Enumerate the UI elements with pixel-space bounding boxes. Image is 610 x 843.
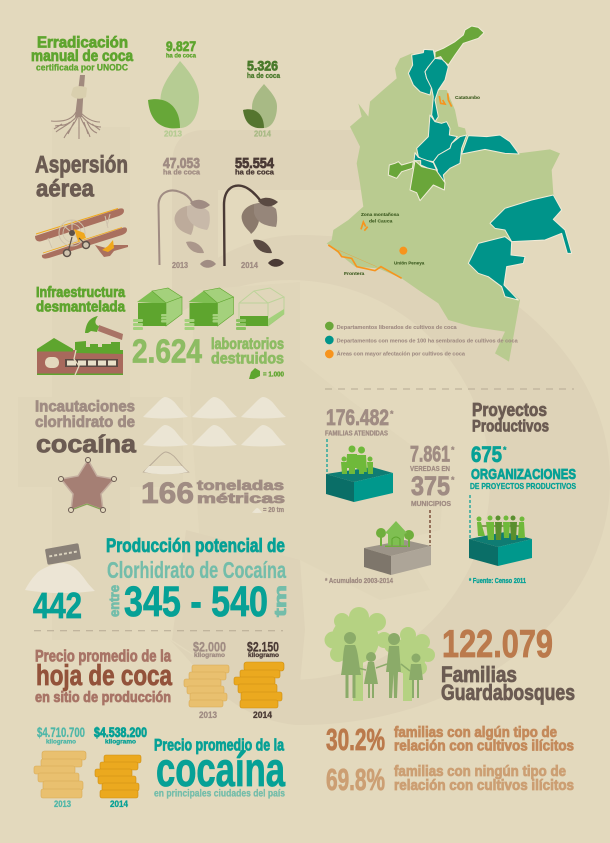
map labels: Unión Peneya bbox=[394, 260, 425, 266]
heading: producción potencial: Producción potencial de bbox=[106, 536, 285, 557]
chart: leaf 2014 bbox=[243, 58, 280, 139]
chart: leaf 2014: 5.326 bbox=[247, 58, 278, 74]
chart: coins 2014: kilogramo bbox=[248, 652, 279, 659]
heading: precio cocaína: cocaína bbox=[156, 744, 285, 797]
stat: 675 organizaciones: 675 bbox=[471, 442, 502, 467]
chart: wilted plant 2013: 2013 bbox=[172, 261, 188, 270]
heading: precio cocaína: en principales ciudades del país bbox=[154, 788, 285, 800]
heading: erradicación: Erradicación bbox=[37, 34, 128, 51]
heading: aspersión aérea bbox=[35, 152, 128, 203]
chart: coins 2013: 2013 bbox=[199, 710, 217, 720]
map labels: del Cauca bbox=[369, 219, 393, 225]
chart: coins cocaína 2013: 2013 bbox=[54, 799, 71, 809]
heading: incautaciones: clorhidrato de bbox=[35, 414, 135, 431]
heading: familias guardabosques bbox=[441, 662, 575, 705]
map labels: Catatumbo bbox=[455, 95, 480, 101]
stat: 176.482 bbox=[325, 405, 394, 438]
legend: pile equals 20 tm bbox=[252, 507, 284, 514]
heading: aspersión aérea: aérea bbox=[36, 176, 95, 203]
stat: 375 municipios: * bbox=[451, 475, 455, 485]
icon: trees and family bbox=[324, 607, 435, 701]
chart: wilted plant 2013: 47.053 bbox=[163, 155, 200, 172]
heading: producción potencial bbox=[106, 536, 286, 583]
icon: police star bbox=[58, 458, 116, 512]
chart: coins cocaína 2013 bbox=[34, 724, 86, 809]
map: teal departments bbox=[408, 49, 572, 300]
chart: wilted plant 2013 bbox=[158, 155, 216, 270]
stat: 166 toneladas: 166 bbox=[141, 477, 194, 510]
stat: 166 toneladas bbox=[141, 477, 285, 510]
heading: infraestructura: desmantelada bbox=[36, 299, 126, 316]
stat: 7.861 veredas: * bbox=[451, 445, 455, 455]
icon: broken factory bbox=[37, 338, 123, 375]
icon: people around table bbox=[476, 516, 525, 540]
heading: incautaciones bbox=[35, 399, 137, 459]
heading: proyectos productivos: Proyectos bbox=[472, 400, 547, 420]
map base bbox=[327, 53, 572, 362]
panel: aspersión aérea bbox=[35, 152, 284, 270]
icon: biplane bbox=[35, 208, 128, 259]
stat: 2.624 laboratorios: 2.624 bbox=[132, 332, 203, 369]
stat: 675 organizaciones bbox=[470, 442, 576, 491]
heading: proyectos productivos bbox=[472, 400, 549, 436]
stat: 69.8% bbox=[326, 762, 574, 797]
chart: wilted plant 2014: ha de coca bbox=[235, 168, 275, 176]
stat: 30.2%: relación con cultivos ilícitos bbox=[394, 738, 574, 755]
chart: wilted plant 2014: 55.554 bbox=[235, 155, 275, 172]
chart: coins cocaína 2014 bbox=[94, 724, 147, 809]
panel: veredas y municipios bbox=[325, 442, 455, 585]
heading: precio hoja: Precio promedio de la bbox=[35, 647, 171, 666]
stat: 345 - 540 tm: entre bbox=[106, 585, 122, 617]
panel: incautaciones bbox=[35, 397, 286, 514]
stat: 345 - 540 tm: tm bbox=[271, 585, 290, 617]
heading: erradicación bbox=[31, 34, 133, 74]
stat: 375 municipios: MUNICIPIOS bbox=[411, 499, 451, 508]
stat: 176.482: * bbox=[390, 409, 394, 419]
heading: precio cocaína bbox=[154, 736, 285, 800]
legend: pile equals 20 tm: = 20 tm bbox=[263, 507, 284, 514]
heading: incautaciones: cocaína bbox=[36, 431, 137, 459]
heading: precio hoja: hoja de coca bbox=[36, 660, 173, 692]
chart: leaf 2013: 2013 bbox=[164, 130, 183, 139]
heading: precio cocaína: Precio promedio de la bbox=[154, 736, 284, 755]
heading: erradicación: certificada por UNODC bbox=[36, 63, 128, 74]
chart: wilted plant 2013: ha de coca bbox=[163, 168, 201, 176]
map labels: Zona montañosa bbox=[361, 212, 399, 218]
chart: destroyed labs houses bbox=[133, 288, 284, 330]
heading: infraestructura: Infraestructura bbox=[36, 284, 126, 301]
heading: infraestructura bbox=[36, 284, 126, 316]
icon: razor blade bbox=[45, 543, 81, 565]
icon: teal block bbox=[469, 532, 532, 566]
stat: 2.624 laboratorios: destruidos bbox=[211, 350, 284, 368]
heading: precio hoja: en sitio de producción bbox=[35, 689, 171, 706]
map legend bbox=[325, 322, 518, 358]
panel: familias atendidas bbox=[325, 405, 394, 502]
panel: erradicación manual bbox=[31, 34, 280, 139]
stat: 442: 442 bbox=[33, 585, 82, 626]
panel: precio hoja de coca bbox=[35, 639, 284, 720]
heading: incautaciones: Incautaciones bbox=[35, 399, 135, 416]
stat: 30.2% bbox=[326, 722, 574, 757]
stat: 166 toneladas: métricas bbox=[197, 490, 285, 506]
map labels: Frontera bbox=[344, 271, 365, 277]
heading: proyectos productivos: Productivos bbox=[472, 417, 549, 436]
stat: 7.861 veredas: VEREDAS EN bbox=[410, 464, 450, 473]
map legend: Departamentos liberados de cultivos de coca bbox=[337, 325, 457, 331]
stat: 30.2%: familias con algún tipo de bbox=[394, 724, 557, 741]
stat: 2.624 laboratorios bbox=[132, 332, 284, 369]
note: acumulado: * Acumulado 2003-2014 bbox=[325, 578, 393, 585]
map: orange affected areas bbox=[328, 93, 452, 278]
panel: familias guardabosques bbox=[324, 607, 575, 797]
chart: leaf 2013: ha de coca bbox=[166, 52, 196, 60]
stat: 7.861 veredas: 7.861 bbox=[410, 442, 450, 467]
chart: coins 2014 bbox=[234, 639, 284, 720]
stat: 345 - 540 tm: 345 - 540 bbox=[124, 578, 268, 626]
chart: coins 2013 bbox=[184, 639, 229, 720]
chart: coins 2014: $2.150 bbox=[247, 639, 279, 655]
heading: familias guardabosques: Familias bbox=[441, 662, 517, 687]
chart: wilted plant 2014: 2014 bbox=[241, 261, 259, 270]
stat: 675 organizaciones: * bbox=[503, 445, 507, 455]
icon: cocaine pile bbox=[25, 563, 95, 593]
icon: grey block bbox=[364, 540, 431, 575]
stat: 69.8%: familias con ningún tipo de bbox=[394, 763, 566, 780]
icon: family bbox=[341, 446, 373, 474]
panel: producción potencial bbox=[25, 536, 290, 626]
chart: coins 2013: kilogramo bbox=[194, 652, 225, 659]
map legend: Departamentos con menos de 100 ha sembrados de cultivos de coca bbox=[337, 339, 518, 345]
stat: 69.8%: relación con cultivos ilícitos bbox=[394, 777, 574, 794]
chart: coins cocaína 2014: kilogramo bbox=[105, 739, 136, 746]
map labels bbox=[344, 95, 480, 277]
chart: coins cocaína 2013: $4.710.700 bbox=[37, 724, 85, 740]
chart: coins cocaína 2014: 2014 bbox=[110, 799, 128, 809]
chart: coins 2014: 2014 bbox=[253, 710, 272, 720]
chart: coins cocaína 2013: kilogramo bbox=[46, 739, 76, 746]
chart: wilted plant 2014 bbox=[224, 155, 284, 270]
chart: leaf 2013 bbox=[148, 38, 199, 139]
chart: leaf 2014: ha de coca bbox=[247, 73, 280, 80]
legend: house equals 1000: = 1.000 bbox=[263, 372, 284, 379]
stat: 166 toneladas: toneladas bbox=[197, 477, 284, 493]
icon: uprooted plant bbox=[51, 75, 101, 139]
chart: cocaine piles bbox=[143, 397, 286, 474]
map: Colombia bbox=[325, 26, 572, 362]
stat: 675 organizaciones: DE PROYECTOS PRODUCTIVOS bbox=[470, 481, 576, 491]
panel: precio cocaína bbox=[34, 724, 285, 809]
map: green departments bbox=[388, 26, 484, 201]
chart: leaf 2014: 2014 bbox=[254, 130, 272, 139]
stat: 122.079: 122.079 bbox=[442, 623, 553, 666]
chart: leaf 2013: 9.827 bbox=[166, 38, 196, 54]
stat: 7.861 veredas bbox=[410, 442, 455, 473]
heading: producción potencial: Clorhidrato de Cocaína bbox=[107, 557, 286, 583]
stat: 30.2%: 30.2% bbox=[326, 722, 385, 757]
icon: house with trees bbox=[376, 521, 414, 547]
panel: infraestructura desmantelada bbox=[36, 284, 284, 379]
note: fuente: * Fuente: Censo 2011 bbox=[469, 578, 526, 585]
chart: coins 2013: $2.000 bbox=[193, 639, 226, 655]
map legend: Áreas con mayor afectación por cultivos de coca bbox=[337, 351, 466, 358]
heading: aspersión aérea: Aspersión bbox=[35, 152, 128, 179]
stat: 2.624 laboratorios: laboratorios bbox=[211, 336, 284, 353]
stat: 69.8%: 69.8% bbox=[326, 762, 385, 797]
stat: 675 organizaciones: ORGANIZACIONES bbox=[471, 466, 576, 483]
stat: 176.482: FAMILIAS ATENDIDAS bbox=[325, 431, 388, 438]
heading: erradicación: manual de coca bbox=[31, 48, 133, 65]
icon: teal block bbox=[326, 467, 393, 502]
icon: hammer bbox=[85, 316, 123, 340]
stat: 375 municipios: 375 bbox=[411, 471, 450, 501]
chart: coins cocaína 2014: $4.538.200 bbox=[94, 724, 147, 740]
stat: 176.482: 176.482 bbox=[326, 405, 389, 430]
panel: proyectos productivos bbox=[469, 400, 576, 585]
heading: precio hoja bbox=[35, 647, 173, 706]
heading: familias guardabosques: Guardabosques bbox=[441, 680, 575, 705]
legend: house equals 1000 bbox=[249, 368, 284, 379]
